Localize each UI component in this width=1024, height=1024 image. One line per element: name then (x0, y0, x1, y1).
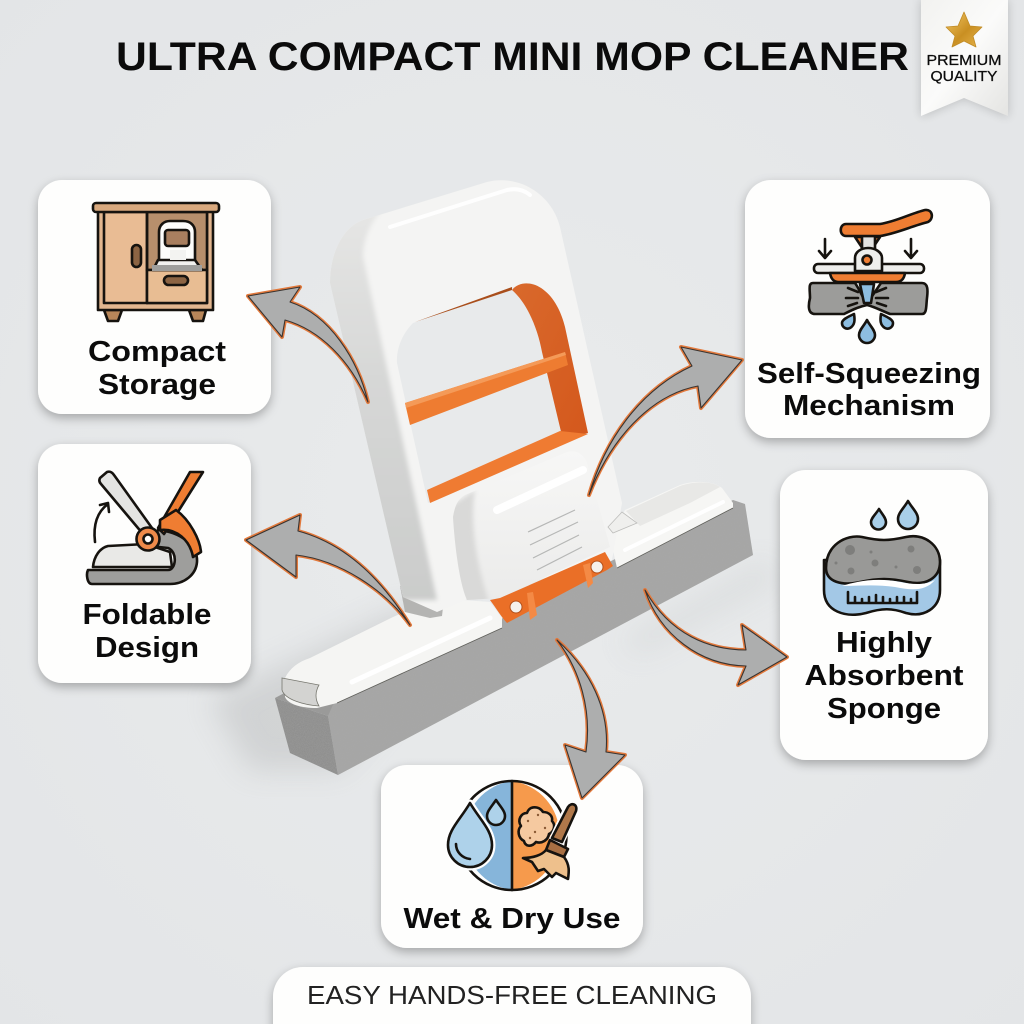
panel: self-squeezing mechanism (745, 180, 990, 438)
panel: foldable design (38, 444, 251, 683)
arrow: to wet and dry use (557, 640, 625, 798)
icon: mini mop in cabinet (152, 221, 202, 271)
card label: Highly (836, 627, 932, 659)
card label: Self-Squeezing (757, 358, 981, 390)
footer pill: easy hands-free cleaning (273, 967, 751, 1024)
panel: wet and dry use (381, 765, 643, 948)
card label: Absorbent (804, 660, 964, 692)
footer text: EASY HANDS-FREE CLEANING (307, 980, 717, 1010)
mop sponge (275, 500, 753, 775)
mop base right (610, 482, 733, 568)
card label (82, 599, 212, 664)
icon: squeeze mechanism (809, 210, 932, 343)
icon: cabinet (93, 203, 219, 321)
squeeze block (453, 466, 587, 600)
badge text: QUALITY (930, 69, 998, 85)
upper orange bar (405, 352, 568, 425)
handle side bevel (322, 206, 437, 600)
card label: Compact (88, 336, 226, 368)
card label: Mechanism (783, 390, 955, 422)
window orange right wall (512, 283, 588, 440)
product: mini mop (275, 180, 753, 775)
mop base left notch (282, 678, 319, 706)
badge text (926, 53, 1002, 85)
handle hinge foot (400, 586, 445, 618)
title: ULTRA COMPACT MINI MOP CLEANER (116, 35, 909, 79)
arrow: to self-squeezing mechanism (589, 347, 742, 495)
orange clamp (490, 552, 613, 623)
arrow: to foldable design (246, 515, 410, 625)
card label: Foldable (82, 599, 212, 631)
card label (757, 358, 981, 422)
card label (804, 627, 964, 725)
icon: sponge with drops (824, 501, 940, 615)
arrow: to highly absorbent sponge (645, 590, 787, 685)
mop base left (282, 598, 502, 708)
card label: Design (95, 632, 199, 664)
card label: Sponge (827, 693, 941, 725)
handle window (397, 283, 588, 503)
window top orange edge (415, 287, 512, 322)
floor shadow under mop (210, 560, 780, 770)
handle fold notch (608, 512, 637, 533)
icon: wet and dry split circle (448, 781, 576, 890)
lower orange bar (427, 431, 588, 503)
icon: gold star (946, 12, 982, 47)
dry dust and broom (519, 804, 576, 879)
panel: compact storage (38, 180, 271, 414)
card label: Wet & Dry Use (404, 903, 620, 935)
handle silhouette (330, 180, 622, 612)
card label: Storage (98, 369, 216, 401)
wet drops (448, 800, 505, 867)
premium quality ribbon badge (921, 0, 1008, 117)
handle top highlight (390, 189, 530, 227)
icon: folding mop (87, 472, 203, 584)
block vents (528, 510, 582, 570)
panel: highly absorbent sponge (780, 470, 988, 760)
arrow: to compact storage (248, 287, 368, 402)
card label (88, 336, 226, 401)
badge text: PREMIUM (926, 53, 1002, 69)
